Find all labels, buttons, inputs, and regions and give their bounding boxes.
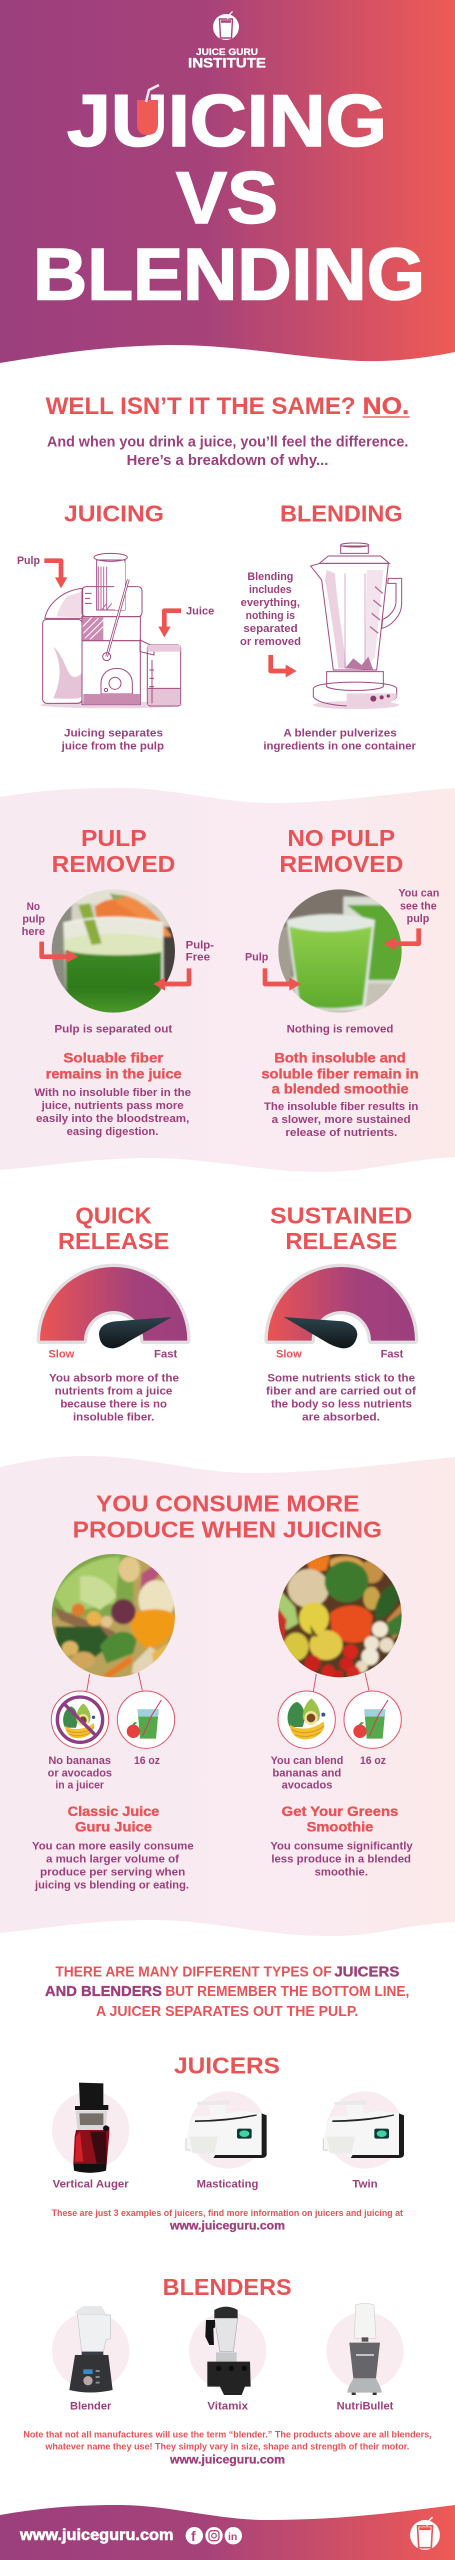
product: blender (52, 2306, 129, 2392)
text: sustained release: the body so less nutrients (271, 1399, 412, 1411)
note: juicers: These are just 3 examples of juicers, find more information on juicers and juicing at (52, 2208, 403, 2218)
social icons: f (191, 2528, 196, 2544)
social icons: in (228, 2531, 237, 2543)
label: blending includes everything: everything, (241, 597, 300, 609)
logo: Juice Guru Institute: JUICE GURU (196, 47, 258, 57)
label: vitamix: Vitamix (207, 2400, 249, 2412)
illustration: blender (311, 543, 402, 709)
label: no bananas: No bananas (48, 1755, 111, 1767)
text: juice fiber explanation: With no insoluble fiber in the (34, 1087, 191, 1099)
logo: Juice Guru Institute: INSTITUTE (188, 54, 266, 70)
text: juice fiber explanation: easily into the bloodstream, (36, 1113, 189, 1125)
gauge: quick release (40, 1267, 187, 1348)
title: Juicing vs Blending: BLENDING (33, 234, 425, 316)
subheading: classic juice (68, 1803, 160, 1835)
heading: well isn't it the same: NO. (363, 393, 409, 420)
heading: juicers: JUICERS (174, 2052, 280, 2078)
statement: bottom line: A JUICER SEPARATES OUT THE PULP. (96, 2003, 358, 2020)
gauge labels: quick (48, 1348, 178, 1360)
photo: green smoothie (278, 889, 402, 1013)
text: consume less: smoothie. (315, 1867, 368, 1879)
heading: juicing: JUICING (64, 501, 164, 527)
text: sustained release (266, 1373, 416, 1424)
arrow: into blender (271, 655, 297, 677)
heading: quick release: QUICK (75, 1202, 152, 1228)
caption: pulp is separated out: Pulp is separated out (54, 1023, 173, 1035)
text: consume less: less produce in a blended (271, 1854, 411, 1866)
text: smoothie fiber explanation: The insoluble fiber results in (264, 1101, 419, 1113)
arrow: pulp (265, 968, 301, 991)
section: release speed (40, 1202, 416, 1424)
subheading: both fibers (261, 1050, 419, 1097)
label: blending includes everything (240, 571, 301, 648)
arrow: juice (158, 611, 181, 637)
heading: blending: BLENDING (280, 501, 403, 527)
label: blending includes everything: nothing is (246, 610, 295, 622)
label: nutribullet: NutriBullet (337, 2400, 394, 2412)
panel: pulp comparison (22, 825, 440, 1139)
heading: pulp removed: PULP (81, 825, 147, 851)
subheading: soluble fiber (46, 1050, 182, 1081)
statement: bottom line: THERE ARE MANY DIFFERENT TYPES OF (55, 1964, 332, 1981)
gauge: sustained release (268, 1267, 415, 1348)
label: twin: Twin (352, 2179, 378, 2191)
subheading: classic juice: Classic Juice (68, 1803, 160, 1819)
note: blenders: whatever name they use! They simply vary in size, shape and strength of their motor. (44, 2441, 409, 2451)
label: you can see the pulp: see the (400, 900, 437, 912)
link: website: www.juiceguru.com (169, 2219, 285, 2232)
label: you can blend: bananas and (272, 1767, 341, 1779)
product: twin gear juicer (323, 2091, 404, 2169)
caption: juicing: juice from the pulp (61, 740, 164, 752)
heading: you consume more produce: PRODUCE WHEN JUICING (73, 1517, 382, 1543)
label: blending includes everything: Blending (247, 571, 293, 583)
label: blending includes everything: includes (249, 584, 292, 596)
caption: blending: A blender pulverizes (283, 728, 397, 740)
statement: bottom line: JUICERS (334, 1964, 399, 1981)
product: nutribullet (326, 2303, 404, 2395)
arrow: pulp (44, 561, 67, 588)
arrow: no pulp here (42, 942, 78, 963)
label: blending includes everything: or removed (240, 636, 301, 648)
connector lines: smoothie (313, 1673, 369, 1692)
label: no bananas: in a juicer (55, 1780, 105, 1792)
text: quick release: because there is no (60, 1399, 167, 1411)
icon: no bananas or avocados (51, 1691, 109, 1748)
text: consume less: You consume significantly (270, 1841, 414, 1853)
photo: juice produce (48, 1551, 178, 1681)
icon: juice cup in letter U (137, 85, 159, 135)
icon: bananas and avocados (278, 1691, 335, 1748)
caption: juicing: Juicing separates (64, 728, 163, 740)
panel: produce (32, 1491, 414, 1892)
product: vitamix (189, 2307, 266, 2395)
text: consume more (32, 1841, 194, 1892)
heading: quick release: RELEASE (58, 1228, 169, 1254)
panel: produce background (0, 1456, 455, 1936)
social icons (186, 2527, 242, 2544)
label: masticating: Masticating (197, 2179, 258, 2191)
header banner (0, 0, 455, 363)
text: consume more: juicing vs blending or eating. (34, 1880, 189, 1892)
gauge needle: slow (284, 1317, 357, 1348)
subheading: soluble fiber: remains in the juice (46, 1065, 182, 1081)
gauge labels: sustained (276, 1348, 404, 1360)
footer website: www.juiceguru.com (19, 2527, 174, 2544)
text: smoothie fiber explanation: release of nutrients. (285, 1127, 397, 1139)
note: blenders (23, 2430, 432, 2451)
label: no pulp here: here (22, 926, 45, 938)
logo: Juice Guru Institute (188, 12, 266, 70)
heading: well isn't it the same: WELL ISN’T IT THE SAME? (46, 393, 356, 420)
label: pulp-free (186, 939, 214, 964)
gauge labels: sustained: Fast (381, 1348, 404, 1360)
statement: bottom line (45, 1964, 409, 2020)
subheading: Here’s a breakdown of why... (127, 453, 328, 469)
caption: blending: ingredients in one container (263, 740, 417, 752)
caption: blending (263, 728, 417, 752)
text: consume more: a much larger volume of (46, 1854, 179, 1866)
text: juice fiber explanation: easing digestion. (67, 1126, 158, 1138)
heading: no pulp removed (279, 825, 403, 877)
connector lines: juice (87, 1673, 142, 1692)
product: vertical auger juicer (52, 2083, 129, 2173)
heading: pulp removed: REMOVED (52, 851, 175, 877)
label: no pulp here: pulp (22, 913, 45, 925)
heading: sustained release (270, 1202, 412, 1254)
text: smoothie fiber explanation (264, 1101, 419, 1139)
text: juice fiber explanation (34, 1087, 191, 1138)
label: no bananas: or avocados (48, 1767, 112, 1779)
product: masticating juicer (186, 2091, 267, 2169)
heading: quick release (58, 1202, 169, 1254)
icon: 16 oz juice (117, 1691, 175, 1748)
text: quick release: You absorb more of the (49, 1373, 179, 1385)
label: 16 oz: 16 oz (360, 1755, 386, 1767)
label: vertical auger: Vertical Auger (53, 2179, 129, 2191)
footer logo (410, 2517, 440, 2550)
statement: bottom line: BUT REMEMBER THE BOTTOM LINE, (165, 1983, 409, 2000)
subheading: classic juice: Guru Juice (75, 1819, 152, 1835)
label: no pulp here (22, 901, 45, 938)
text: consume more: You can more easily consume (32, 1841, 194, 1853)
icon: 16 oz smoothie (344, 1691, 401, 1748)
text: sustained release: are absorbed. (302, 1412, 380, 1424)
gauge labels: sustained: Slow (276, 1348, 302, 1360)
arrow: see the pulp (383, 928, 419, 950)
statement: bottom line: AND BLENDERS (45, 1983, 162, 2000)
title: Juicing vs Blending (33, 81, 425, 316)
label: blender: Blender (70, 2400, 112, 2412)
section: juicers (45, 1964, 409, 2232)
label: no pulp here: No (27, 901, 40, 913)
heading: you consume more produce: YOU CONSUME MORE (96, 1491, 359, 1517)
arrow: pulp-free (153, 968, 189, 991)
label: no bananas (48, 1755, 112, 1792)
text: consume more: produce per serving when (40, 1867, 186, 1879)
heading: sustained release: RELEASE (285, 1228, 397, 1254)
label: you can see the pulp (398, 888, 440, 925)
title: Juicing vs Blending: JUICING (67, 81, 387, 162)
illustration: juicer (40, 553, 183, 708)
label: you can see the pulp: pulp (407, 913, 430, 925)
note: blenders: Note that not all manufactures will use the term “blender.” The products above are all blenders, (23, 2430, 432, 2440)
text: smoothie fiber explanation: a slower, more sustained (272, 1114, 411, 1126)
label: 16 oz: 16 oz (134, 1755, 160, 1767)
gauge labels: quick: Fast (154, 1348, 178, 1360)
section: intro and comparison (17, 393, 417, 752)
heading: no pulp removed: REMOVED (279, 851, 403, 877)
subheading: both fibers: Both insoluble and (274, 1050, 406, 1066)
subheading: both fibers: soluble fiber remain in (261, 1065, 419, 1081)
label: pulp-free: Free (186, 952, 210, 964)
label: you can blend (271, 1755, 343, 1792)
label: pulp: Pulp (17, 555, 40, 567)
text: quick release: nutrients from a juice (55, 1386, 172, 1398)
panel: pulp comparison background (0, 788, 455, 1172)
subheading (47, 435, 408, 469)
heading: no pulp removed: NO PULP (287, 825, 395, 851)
label: you can blend: You can blend (271, 1755, 343, 1767)
label: you can blend: avocados (282, 1780, 332, 1792)
text: sustained release: Some nutrients stick to the (267, 1373, 415, 1385)
subheading: get your greens: Smoothie (307, 1819, 374, 1835)
text: consume less (270, 1841, 414, 1879)
text: quick release: insoluble fiber. (73, 1412, 154, 1424)
link: website: www.juiceguru.com (169, 2453, 285, 2466)
text: sustained release: fiber and are carried out of (266, 1386, 416, 1398)
subheading: get your greens: Get Your Greens (282, 1803, 399, 1819)
subheading: get your greens (282, 1803, 399, 1835)
photo: green juice with carrots (52, 890, 175, 1013)
section: blenders (23, 2274, 432, 2466)
caption: juicing (61, 728, 164, 752)
title: Juicing vs Blending: VS (176, 158, 278, 239)
text: quick release (49, 1373, 179, 1424)
gauge labels: quick: Slow (48, 1348, 75, 1360)
heading: pulp removed (52, 825, 175, 877)
heading: sustained release: SUSTAINED (270, 1202, 412, 1228)
footer (0, 2505, 455, 2560)
photo: smoothie produce (275, 1551, 405, 1681)
label: you can see the pulp: You can (398, 888, 440, 900)
gauge needle: fast (99, 1317, 172, 1348)
text: juice fiber explanation: juice, nutrients pass more (41, 1100, 184, 1112)
label: pulp-free: Pulp- (186, 939, 214, 951)
subheading: And when you drink a juice, you’ll feel the difference. (47, 435, 408, 451)
heading: you consume more produce (73, 1491, 382, 1543)
caption: nothing is removed: Nothing is removed (287, 1023, 393, 1035)
label: blending includes everything: separated (243, 623, 298, 635)
heading: blenders: BLENDERS (163, 2274, 292, 2300)
label: pulp: Pulp (245, 952, 269, 964)
label: juice: Juice (186, 605, 214, 617)
subheading: both fibers: a blended smoothie (272, 1081, 409, 1097)
subheading: soluble fiber: Soluable fiber (63, 1050, 164, 1066)
